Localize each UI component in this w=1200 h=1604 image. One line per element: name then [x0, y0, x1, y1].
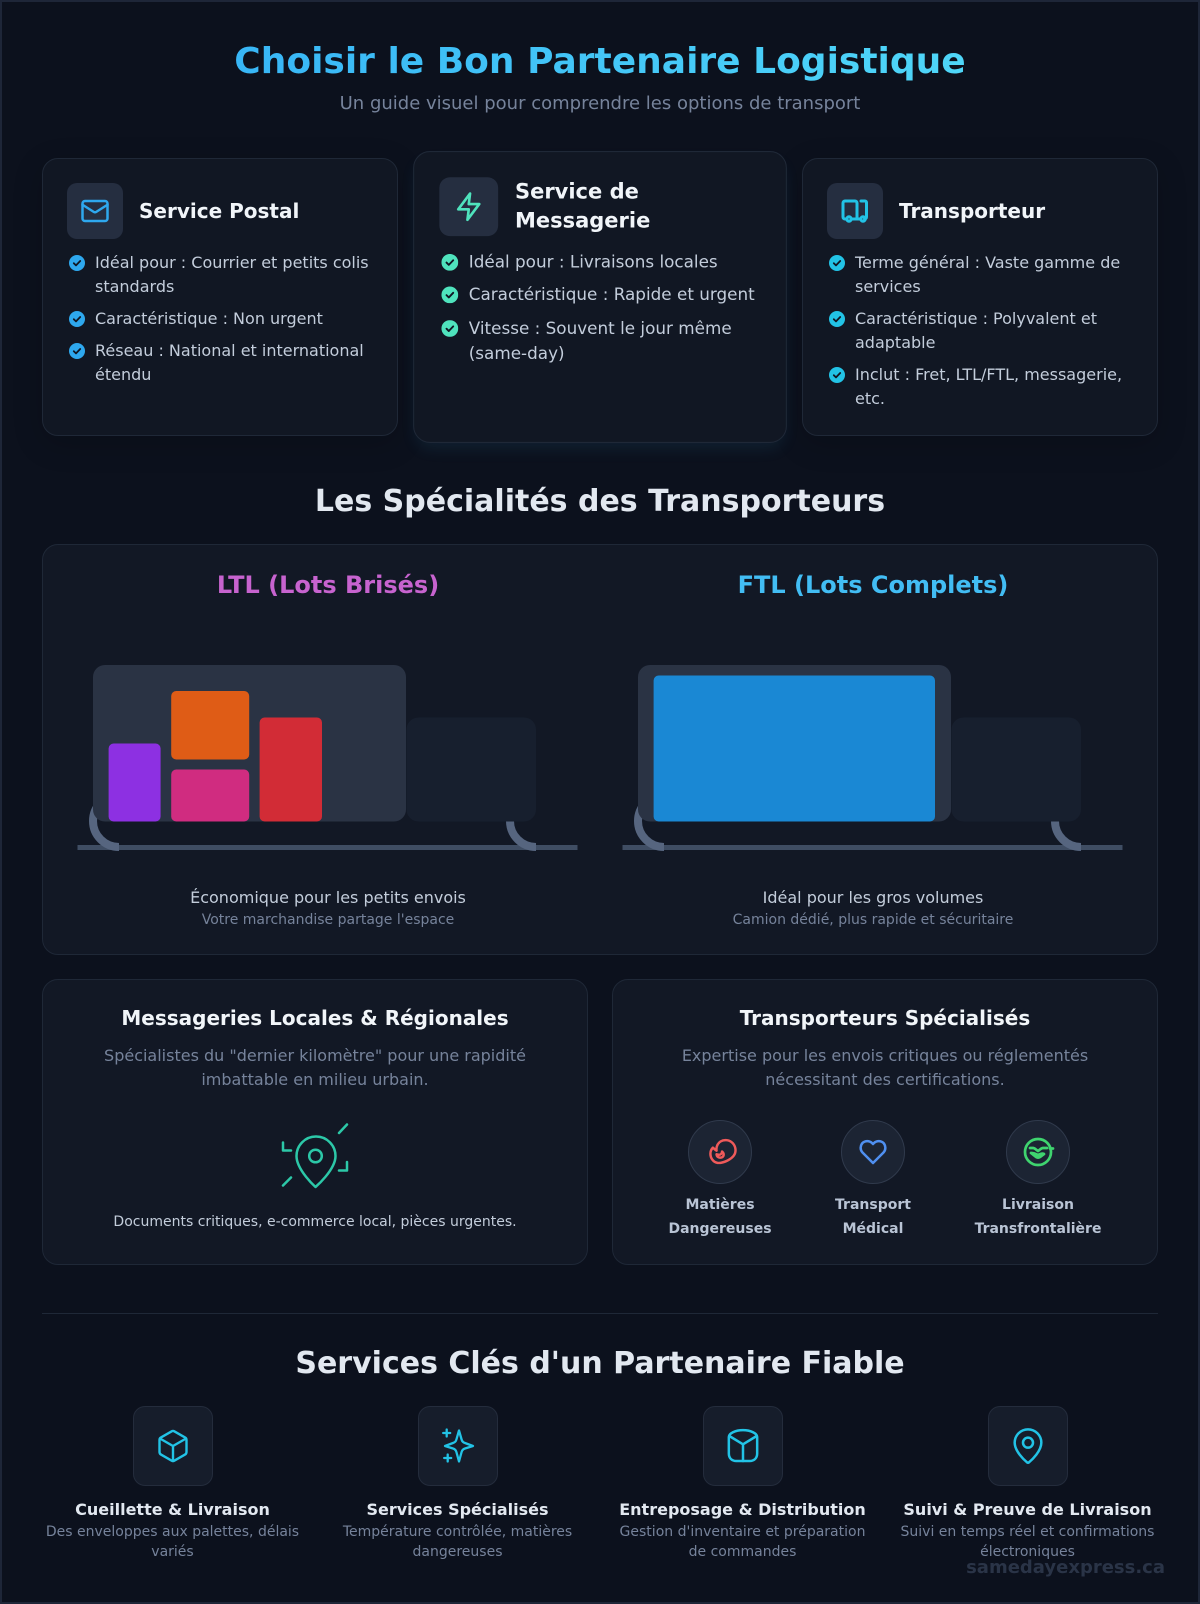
- list item: Inclut : Fret, LTL/FTL, messagerie,: [855, 365, 1122, 384]
- list item: Vitesse : Souvent le jour même: [469, 318, 732, 338]
- service: cueillette: [46, 1406, 299, 1560]
- heading: transporteur: Transporteur: [899, 199, 1045, 223]
- list item: Terme général : Vaste gamme de: [855, 253, 1120, 272]
- list item: [829, 365, 1122, 408]
- truck: FTL: [622, 665, 1122, 850]
- title: Suivi & Preuve de Livraison: [903, 1500, 1152, 1519]
- description: Des enveloppes aux palettes, délais: [46, 1524, 299, 1540]
- heading: Messageries Locales & Régionales: [121, 1006, 509, 1030]
- description: Spécialistes du "dernier kilomètre" pour une rapidité: [104, 1046, 526, 1065]
- list item: [442, 318, 732, 363]
- icon: globe: [1006, 1120, 1070, 1184]
- title: Cueillette & Livraison: [75, 1500, 270, 1519]
- label: Dangereuses: [668, 1221, 772, 1237]
- divider: [42, 1313, 1158, 1314]
- description: imbattable en milieu urbain.: [201, 1070, 429, 1089]
- panel: service postal: [42, 158, 398, 436]
- list item: standards: [95, 277, 174, 296]
- panel: transporteur: [802, 158, 1158, 436]
- truck: LTL: [78, 665, 578, 850]
- list item: adaptable: [855, 333, 935, 352]
- list item: Idéal pour : Courrier et petits colis: [95, 253, 369, 272]
- title: Entreposage & Distribution: [619, 1500, 866, 1519]
- list item: Idéal pour : Livraisons locales: [469, 252, 718, 272]
- heading: spécialités: Les Spécialités des Transporteurs: [315, 484, 885, 519]
- label: Transfrontalière: [975, 1221, 1101, 1237]
- label: [974, 1197, 1101, 1237]
- description: Suivi en temps réel et confirmations: [901, 1524, 1154, 1540]
- label: [835, 1197, 911, 1237]
- panel: service de messagerie: [413, 151, 787, 443]
- description: [46, 1524, 299, 1560]
- heading: Transporteurs Spécialisés: [740, 1006, 1030, 1030]
- service: suivi: [901, 1406, 1154, 1560]
- description: variés: [151, 1544, 194, 1560]
- icon: flame: [688, 1120, 752, 1184]
- list item: Caractéristique : Non urgent: [95, 309, 323, 328]
- list item: Caractéristique : Rapide et urgent: [469, 284, 755, 304]
- list item: Caractéristique : Polyvalent et: [855, 309, 1097, 328]
- description: de commandes: [689, 1544, 796, 1560]
- icon: cube: [133, 1406, 213, 1486]
- watermark: samedayexpress.ca: [966, 1557, 1165, 1578]
- heading: service de messagerie: Messagerie: [515, 208, 650, 233]
- label: Médical: [843, 1221, 903, 1237]
- heading: service de messagerie: [515, 178, 650, 233]
- subtitle: Un guide visuel pour comprendre les options de transport: [340, 93, 860, 114]
- list item: étendu: [95, 365, 151, 384]
- description: dangereuses: [413, 1544, 502, 1560]
- label: Livraison: [1002, 1197, 1074, 1213]
- icon: sparkles: [418, 1406, 498, 1486]
- icon: location pin: [282, 1123, 348, 1188]
- label: [668, 1197, 772, 1237]
- title: Choisir le Bon Partenaire Logistique: [234, 41, 966, 82]
- list item: [69, 253, 369, 296]
- list item: etc.: [855, 389, 885, 408]
- panel: LTL and FTL comparison: [42, 544, 1158, 955]
- label: Matières: [685, 1197, 755, 1213]
- chart: trucks: [78, 665, 1122, 851]
- text: FTL caption: Idéal pour les gros volumes: [763, 888, 983, 907]
- icon: box: [703, 1406, 783, 1486]
- list item: [829, 309, 1097, 352]
- list item: [829, 253, 1120, 296]
- description: nécessitant des certifications.: [765, 1070, 1005, 1089]
- list item: (same-day): [469, 343, 565, 363]
- description: [901, 1524, 1154, 1560]
- heading: service postal: Service Postal: [139, 199, 299, 223]
- panel: messageries locales: [42, 979, 588, 1265]
- list item: services: [855, 277, 921, 296]
- title: Services Spécialisés: [366, 1500, 549, 1519]
- text: FTL sub caption: Camion dédié, plus rapide et sécuritaire: [733, 912, 1013, 928]
- description: Gestion d'inventaire et préparation: [620, 1524, 865, 1540]
- heading: service de messagerie: Service de: [515, 178, 639, 204]
- caption: Documents critiques, e-commerce local, pièces urgentes.: [113, 1214, 517, 1230]
- icon: truck: [827, 183, 883, 239]
- heading: LTL: LTL (Lots Brisés): [217, 571, 439, 599]
- description: Expertise pour les envois critiques ou réglementés: [682, 1046, 1088, 1065]
- list item: [69, 341, 364, 384]
- description: électroniques: [980, 1544, 1075, 1560]
- list item: Réseau : National et international: [95, 341, 364, 360]
- heading: FTL: FTL (Lots Complets): [738, 571, 1008, 599]
- panel: transporteurs spécialisés: [612, 979, 1158, 1265]
- service: spécialisés: [342, 1406, 572, 1560]
- icon: envelope: [67, 183, 123, 239]
- text: LTL sub caption: Votre marchandise partage l'espace: [202, 912, 454, 928]
- icon: pin: [988, 1406, 1068, 1486]
- description: [342, 1524, 572, 1560]
- icon: lightning: [439, 177, 498, 236]
- description: [682, 1046, 1088, 1089]
- icon: heart: [841, 1120, 905, 1184]
- label: Transport: [835, 1197, 911, 1213]
- service: entreposage: [619, 1406, 866, 1560]
- heading: services clés: Services Clés d'un Partenaire Fiable: [295, 1346, 905, 1381]
- description: [620, 1524, 865, 1560]
- text: LTL caption: Économique pour les petits envois: [190, 888, 466, 907]
- description: [104, 1046, 526, 1089]
- description: Température contrôlée, matières: [343, 1524, 572, 1540]
